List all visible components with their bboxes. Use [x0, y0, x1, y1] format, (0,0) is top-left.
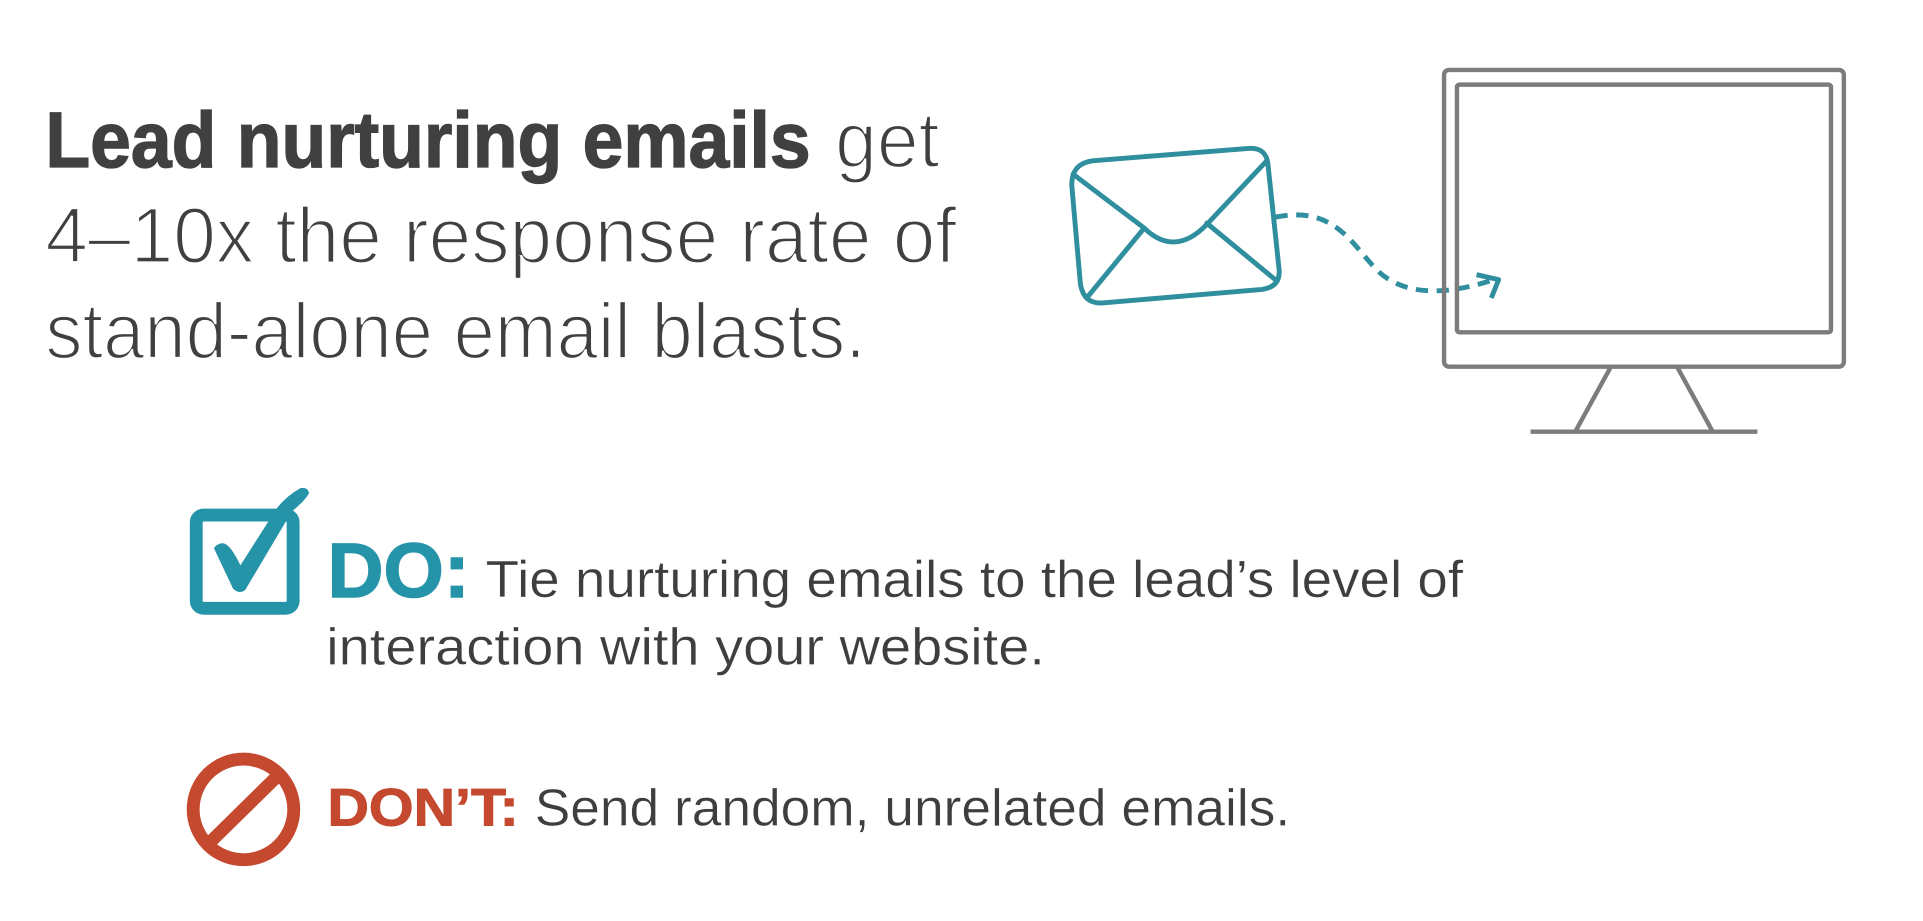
headline line 3: stand-alone email blasts. [45, 287, 866, 375]
icon: teal checkbox [196, 488, 309, 608]
headline [45, 96, 957, 375]
dont label: DON’T: [327, 778, 519, 837]
do label: DO: [327, 528, 470, 614]
icon: red prohibition sign [193, 759, 294, 860]
headline line 2: 4–10x the response rate of [45, 191, 957, 279]
do tip [326, 528, 1464, 676]
arrow: dashed path from envelope to monitor [1275, 215, 1499, 298]
headline bold lead: Lead nurturing emails [45, 96, 811, 184]
do text line 2: interaction with your website. [326, 618, 1045, 676]
icon: desktop monitor [1444, 70, 1844, 432]
headline line 1 end: get [835, 96, 940, 184]
do text line 1: Tie nurturing emails to the lead’s level of [486, 550, 1464, 608]
dont tip [327, 778, 1290, 837]
dont text: Send random, unrelated emails. [535, 778, 1290, 836]
icon: envelope [1072, 148, 1279, 303]
